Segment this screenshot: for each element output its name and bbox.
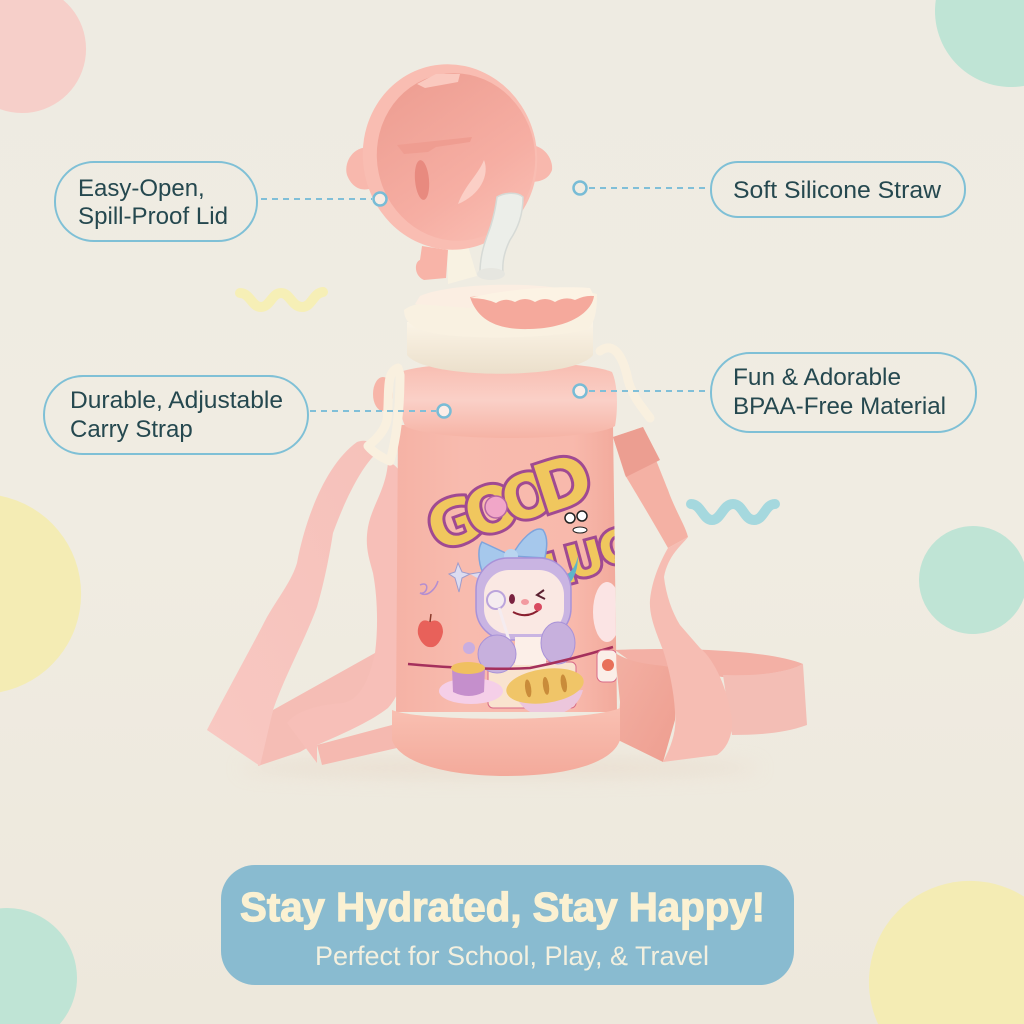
good luck text: O <box>492 456 564 539</box>
pudding plate <box>439 678 503 704</box>
napkin <box>488 662 576 708</box>
callout: straw <box>574 162 965 217</box>
sparkle and swirl <box>448 562 481 592</box>
banner headline: Stay Hydrated, Stay Happy! <box>240 884 765 930</box>
bottle body <box>396 425 617 712</box>
left inner strap <box>287 462 409 763</box>
strap loop right <box>600 348 650 418</box>
flap <box>470 287 594 329</box>
right upper strap <box>613 427 688 548</box>
cherry <box>485 496 507 518</box>
open lid inner <box>361 58 551 256</box>
star character <box>565 511 587 533</box>
bottle <box>346 48 650 776</box>
carry strap <box>207 427 807 766</box>
good luck text: C <box>593 517 639 578</box>
straw <box>477 193 523 280</box>
hinge white <box>447 246 477 284</box>
left outer strap <box>207 441 378 766</box>
lid highlight <box>458 160 486 204</box>
callout: strap: Carry Strap <box>70 416 193 443</box>
bowl <box>519 690 583 712</box>
right lower strap <box>615 653 675 762</box>
good luck text: O <box>454 466 529 553</box>
right twisted strap <box>650 537 732 762</box>
banner <box>221 865 794 985</box>
strap knob <box>373 377 393 411</box>
callout: lid: Easy-Open, <box>78 175 205 202</box>
spoon <box>487 591 509 640</box>
ground shadow <box>240 758 760 778</box>
character arms <box>478 635 516 673</box>
flap scallop <box>470 287 594 303</box>
lid oval hole <box>413 159 431 201</box>
apple <box>418 614 443 647</box>
lid top clip <box>417 74 460 88</box>
callout: strap <box>44 376 450 454</box>
callout: lid: Spill-Proof Lid <box>78 203 228 230</box>
shirt <box>515 637 546 665</box>
callout: straw: Soft Silicone Straw <box>733 177 942 204</box>
shoulder <box>398 362 617 438</box>
right strap loop front <box>723 664 807 735</box>
cat <box>593 582 616 682</box>
left back band <box>258 653 390 766</box>
artwork <box>408 454 616 712</box>
lid rib <box>397 137 472 154</box>
banner subtitle: Perfect for School, Play, & Travel <box>315 941 709 971</box>
left lower strap <box>317 725 397 765</box>
cream collar <box>407 322 593 374</box>
open lid rim <box>346 48 554 266</box>
good luck text <box>428 454 615 586</box>
callout: lid <box>55 162 386 241</box>
good luck text: D <box>524 438 602 531</box>
character head <box>476 558 571 640</box>
cream cap <box>404 291 597 338</box>
callout: strap: Durable, Adjustable <box>70 387 283 414</box>
eyes and mouth <box>509 590 545 615</box>
right strap loop back <box>615 649 803 677</box>
callout: material: BPAA-Free Material <box>733 393 946 420</box>
yellow squiggle <box>240 292 323 307</box>
good luck text: L <box>537 540 579 599</box>
callout: material <box>574 353 976 432</box>
lid ear left <box>346 147 372 189</box>
bottle base <box>392 708 620 776</box>
callout: material: Fun & Adorable <box>733 364 901 391</box>
table line <box>408 647 613 669</box>
horn <box>568 556 578 582</box>
hinge pink <box>416 246 448 280</box>
cap top <box>415 285 590 308</box>
strap loop left <box>368 368 400 461</box>
bread <box>506 668 584 704</box>
ribbed strap adjuster <box>613 427 660 477</box>
pudding <box>452 668 485 696</box>
good luck text: U <box>560 529 610 590</box>
good luck text: G <box>417 480 490 566</box>
character face <box>484 570 564 634</box>
flower <box>463 642 475 654</box>
lid ear right <box>533 146 552 182</box>
blue squiggle <box>691 504 775 520</box>
bow <box>479 529 547 574</box>
